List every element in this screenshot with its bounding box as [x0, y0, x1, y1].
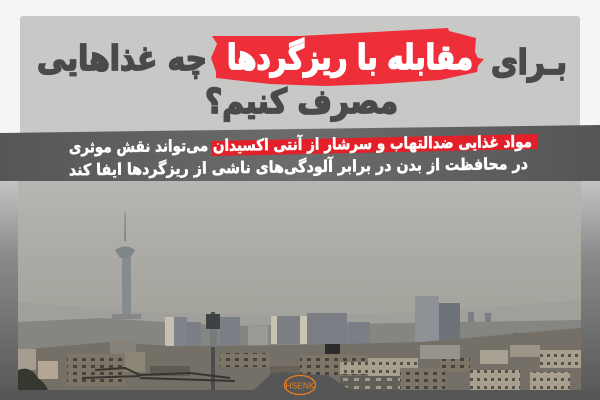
far hill: [18, 318, 581, 390]
title: [37, 38, 567, 122]
subtitle text: [69, 131, 532, 179]
dark tree: [18, 369, 48, 390]
logo tab: [243, 372, 352, 400]
icon: HSENK logo: HSENK: [285, 380, 315, 390]
side mask left: [0, 180, 18, 400]
title phrase: highlighted: مقابله با ریزگردها: [227, 38, 473, 78]
icon: telecom mast: [206, 312, 220, 390]
distant haze ridge: [18, 300, 581, 350]
black tank: [325, 344, 340, 354]
title brush highlight: [211, 28, 484, 86]
subtitle line two: در محافظت از بدن در برابر آلودگی‌های ناشی از ریزگردها ایفا کند: [69, 153, 528, 179]
title line two: مصرف کنیم؟: [205, 82, 398, 122]
buildings: [18, 340, 581, 390]
photo: hazy Tehran skyline: [18, 180, 581, 390]
side mask right: [581, 180, 600, 400]
mid-rise towers: [165, 296, 540, 346]
panel: title card: [20, 16, 580, 196]
title word: left: چه غذاهایی: [37, 39, 207, 79]
title word: right: بـرای: [491, 43, 567, 83]
dark subtitle band: [0, 125, 600, 181]
bottom strip: [0, 390, 600, 400]
dark rooftop lines: [82, 368, 235, 381]
subtitle highlight: [211, 134, 537, 156]
side strips: [0, 180, 600, 400]
city foreground: [18, 328, 581, 390]
icon: Milad tower: [112, 212, 141, 319]
